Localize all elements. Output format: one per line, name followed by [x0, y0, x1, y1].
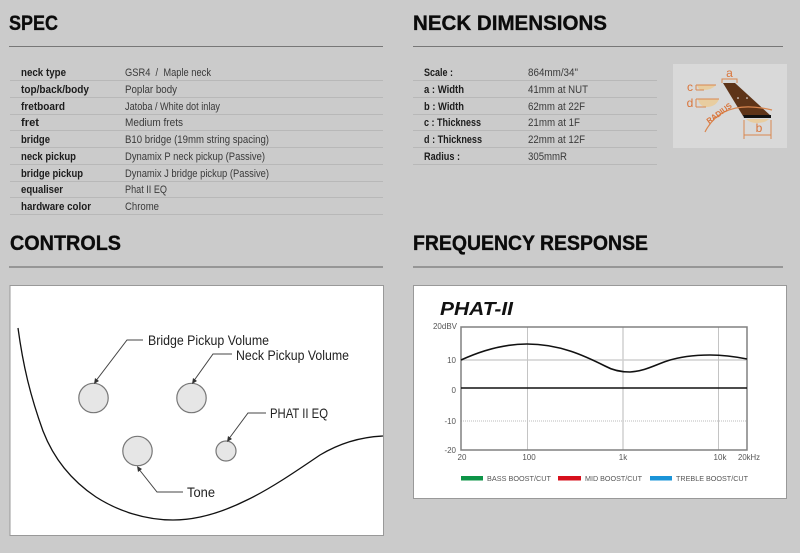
spec table	[10, 67, 383, 214]
spec table: hardware color	[21, 201, 92, 213]
heading: spec: SPEC	[9, 11, 58, 35]
spec table: Dynamix P neck pickup (Passive)	[125, 151, 265, 163]
knob: tone	[123, 436, 215, 500]
line chart: -20	[444, 446, 457, 455]
neck dimensions table	[413, 67, 657, 164]
neck dimensions table: 864mm/34"	[528, 67, 578, 79]
icon: dimension b: b	[756, 121, 763, 135]
spec table: Phat II EQ	[125, 184, 167, 196]
line chart	[433, 322, 760, 462]
heading: neck dimensions: NECK DIMENSIONS	[413, 11, 607, 35]
heading: frequency response: FREQUENCY RESPONSE	[413, 231, 648, 255]
neck dimensions table: c : Thickness	[424, 117, 481, 129]
spec table: Jatoba / White dot inlay	[125, 101, 220, 113]
knob: bridge pickup volume: Bridge Pickup Volume	[148, 332, 269, 348]
chart title: PHAT-II	[440, 299, 514, 319]
spec table: GSR4 / Maple neck	[125, 67, 211, 79]
spec table: bridge	[21, 134, 50, 146]
neck dimensions table: Scale :	[424, 67, 453, 79]
neck dimensions table: Radius :	[424, 151, 460, 163]
legend: BASS BOOST/CUT	[487, 474, 551, 483]
knob: neck pickup volume: Neck Pickup Volume	[236, 347, 349, 363]
spec table: neck pickup	[21, 151, 76, 163]
panel: frequency response	[414, 286, 786, 498]
neck dimensions table: d : Thickness	[424, 134, 482, 146]
spec table: Medium frets	[125, 117, 183, 129]
neck dimensions table: 62mm at 22F	[528, 101, 585, 113]
legend: TREBLE BOOST/CUT	[676, 474, 748, 483]
icon: radius arc: RADIUS	[705, 101, 734, 126]
panel: controls diagram	[10, 286, 384, 536]
spec table: equaliser	[21, 184, 64, 196]
line chart: 0	[452, 386, 457, 395]
line chart: 20kHz	[738, 453, 760, 462]
guitar body outline	[18, 328, 383, 520]
line chart: -10	[444, 417, 457, 426]
knob: neck pickup volume	[177, 347, 349, 413]
line chart: 1k	[619, 453, 628, 462]
knob: bridge pickup volume	[79, 332, 269, 413]
knob: phat ii eq: PHAT II EQ	[270, 405, 328, 421]
icon: dimension d: d	[687, 96, 693, 110]
line chart: 100	[522, 453, 536, 462]
knob: tone: Tone	[187, 484, 215, 500]
spec table: Chrome	[125, 201, 159, 213]
heading: controls: CONTROLS	[10, 231, 121, 255]
neck dimensions table: 22mm at 12F	[528, 134, 585, 146]
line chart: 10k	[714, 453, 727, 462]
neck dimensions table: a : Width	[424, 84, 464, 96]
neck dimensions table: 41mm at NUT	[528, 84, 588, 96]
spec table: top/back/body	[21, 84, 90, 96]
neck dimensions table: 21mm at 1F	[528, 117, 580, 129]
neck dimensions table: 305mmR	[528, 151, 567, 163]
spec table: Poplar body	[125, 84, 177, 96]
legend: MID BOOST/CUT	[585, 474, 642, 483]
line chart: 20	[458, 453, 467, 462]
line chart: 10	[447, 356, 457, 365]
legend	[461, 474, 748, 483]
spec table: B10 bridge (19mm string spacing)	[125, 134, 269, 146]
icon: dimension a: a	[726, 66, 733, 80]
spec table: neck type	[21, 67, 66, 79]
spec table: fret	[21, 117, 39, 129]
neck dimensions table: b : Width	[424, 101, 464, 113]
neck diagram	[673, 64, 787, 148]
spec table: fretboard	[21, 101, 65, 113]
icon: fretboard	[723, 83, 771, 118]
icon: dimension c: c	[687, 80, 693, 94]
spec table: bridge pickup	[21, 168, 83, 180]
knob: phat ii eq	[216, 405, 328, 461]
line chart: 20dBV	[433, 322, 458, 331]
spec table: Dynamix J bridge pickup (Passive)	[125, 168, 269, 180]
